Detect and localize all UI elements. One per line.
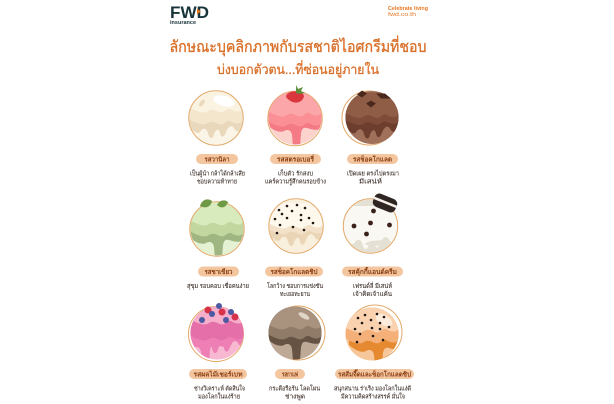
ball: chocolate chip (268, 198, 324, 254)
label: green tea: รสชาเขียว (204, 268, 233, 276)
description: coffee: กระตือรือร้น โลดโผน (269, 384, 321, 392)
ball: orange and chocolate chip (346, 304, 402, 360)
description: fruit sherbet (194, 384, 245, 400)
card: green tea (187, 199, 249, 290)
description: strawberry (265, 168, 326, 186)
card: coffee (267, 304, 325, 400)
label: cookies and cream: รสคุ้กกี้แอนด์ครีม (348, 266, 397, 276)
tagline: fwd.co.th (388, 12, 416, 18)
card: cookies and cream (342, 192, 403, 298)
description: vanilla: ชอบความท้าทาย (197, 178, 237, 186)
description: chocolate chip (267, 282, 324, 298)
ball: chocolate (342, 90, 400, 146)
label: orange and chocolate chip: รสส้มจี๊ดและช็อกโกแลตชิป (338, 368, 411, 378)
description: chocolate (347, 170, 399, 186)
description: chocolate chip: โลกว้าง ชอบการแข่งขัน (267, 282, 324, 290)
description: chocolate chip: ทะเยอทะยาน (280, 291, 311, 298)
ball: vanilla (188, 87, 244, 146)
tagline: Celebrate living (388, 6, 428, 12)
description: chocolate: มีเสน่ห์ (359, 178, 382, 186)
title: ลักษณะบุคลิกภาพกับรสชาติไอศกรีมที่ชอบ (170, 35, 426, 57)
tagline (388, 6, 428, 18)
card: vanilla (188, 87, 245, 186)
description: coffee: ช่างพูด (285, 394, 305, 400)
ball: strawberry (267, 85, 323, 150)
description: strawberry: เก็บตัว รักสงบ (278, 168, 313, 178)
label: chocolate chip: รสช็อคโกแลตชิป (270, 267, 318, 276)
logo: FWD insurance: insurance (170, 20, 196, 26)
label: vanilla: รสวานิลา (204, 155, 230, 163)
card: chocolate (342, 90, 400, 186)
ball: green tea (189, 199, 245, 262)
logo: FWD insurance: FWD (170, 3, 209, 22)
ball: coffee (267, 304, 325, 364)
description: strawberry: แคร์ความรู้สึกคนรอบข้าง (265, 178, 326, 186)
description: cookies and cream (353, 281, 393, 298)
description: vanilla: เป็นผู้นำ กล้าได้กล้าเสีย (190, 168, 245, 178)
title (170, 35, 426, 78)
description: cookies and cream: เจ้าคิดเจ้าแค้น (353, 290, 393, 298)
description: fruit sherbet: ช่างวิเคราะห์ ตัดสินใจ (194, 384, 245, 392)
description: cookies and cream: เฟรนด์ลี่ มีเสน่ห์ (353, 281, 392, 290)
description: chocolate: เปิดเผย ตรงไปตรงมา (347, 170, 399, 178)
description: fruit sherbet: มองโลกในแง่ร้าย (198, 392, 240, 400)
card: orange and chocolate chip (334, 305, 414, 400)
card: fruit sherbet (188, 303, 247, 398)
ball: fruit sherbet (188, 303, 244, 362)
ball: cookies and cream (342, 192, 399, 254)
description: green tea: สุขุม รอบคอบ เชื่อคนง่าย (187, 281, 249, 290)
description: orange and chocolate chip: มีความคิดสร้างสรรค์ มั่นใจ (341, 392, 405, 400)
label: fruit sherbet: รสผลไม้เชอร์เบท (194, 369, 243, 378)
description: orange and chocolate chip (334, 384, 411, 400)
card: strawberry (265, 85, 326, 186)
description: orange and chocolate chip: สนุกสนาน ร่าเริง มองโลกในแง่ดี (334, 384, 411, 392)
title: บ่งบอกตัวตน...ที่ซ่อนอยู่ภายใน (217, 60, 379, 78)
description: coffee (269, 384, 321, 400)
description: vanilla (190, 168, 245, 186)
label: coffee: รสกาแฟ (282, 370, 298, 378)
card: chocolate chip (265, 198, 324, 298)
label: strawberry: รสสตรอเบอรี่ (277, 153, 314, 163)
label: chocolate: รสช็อคโกแลต (353, 154, 392, 163)
